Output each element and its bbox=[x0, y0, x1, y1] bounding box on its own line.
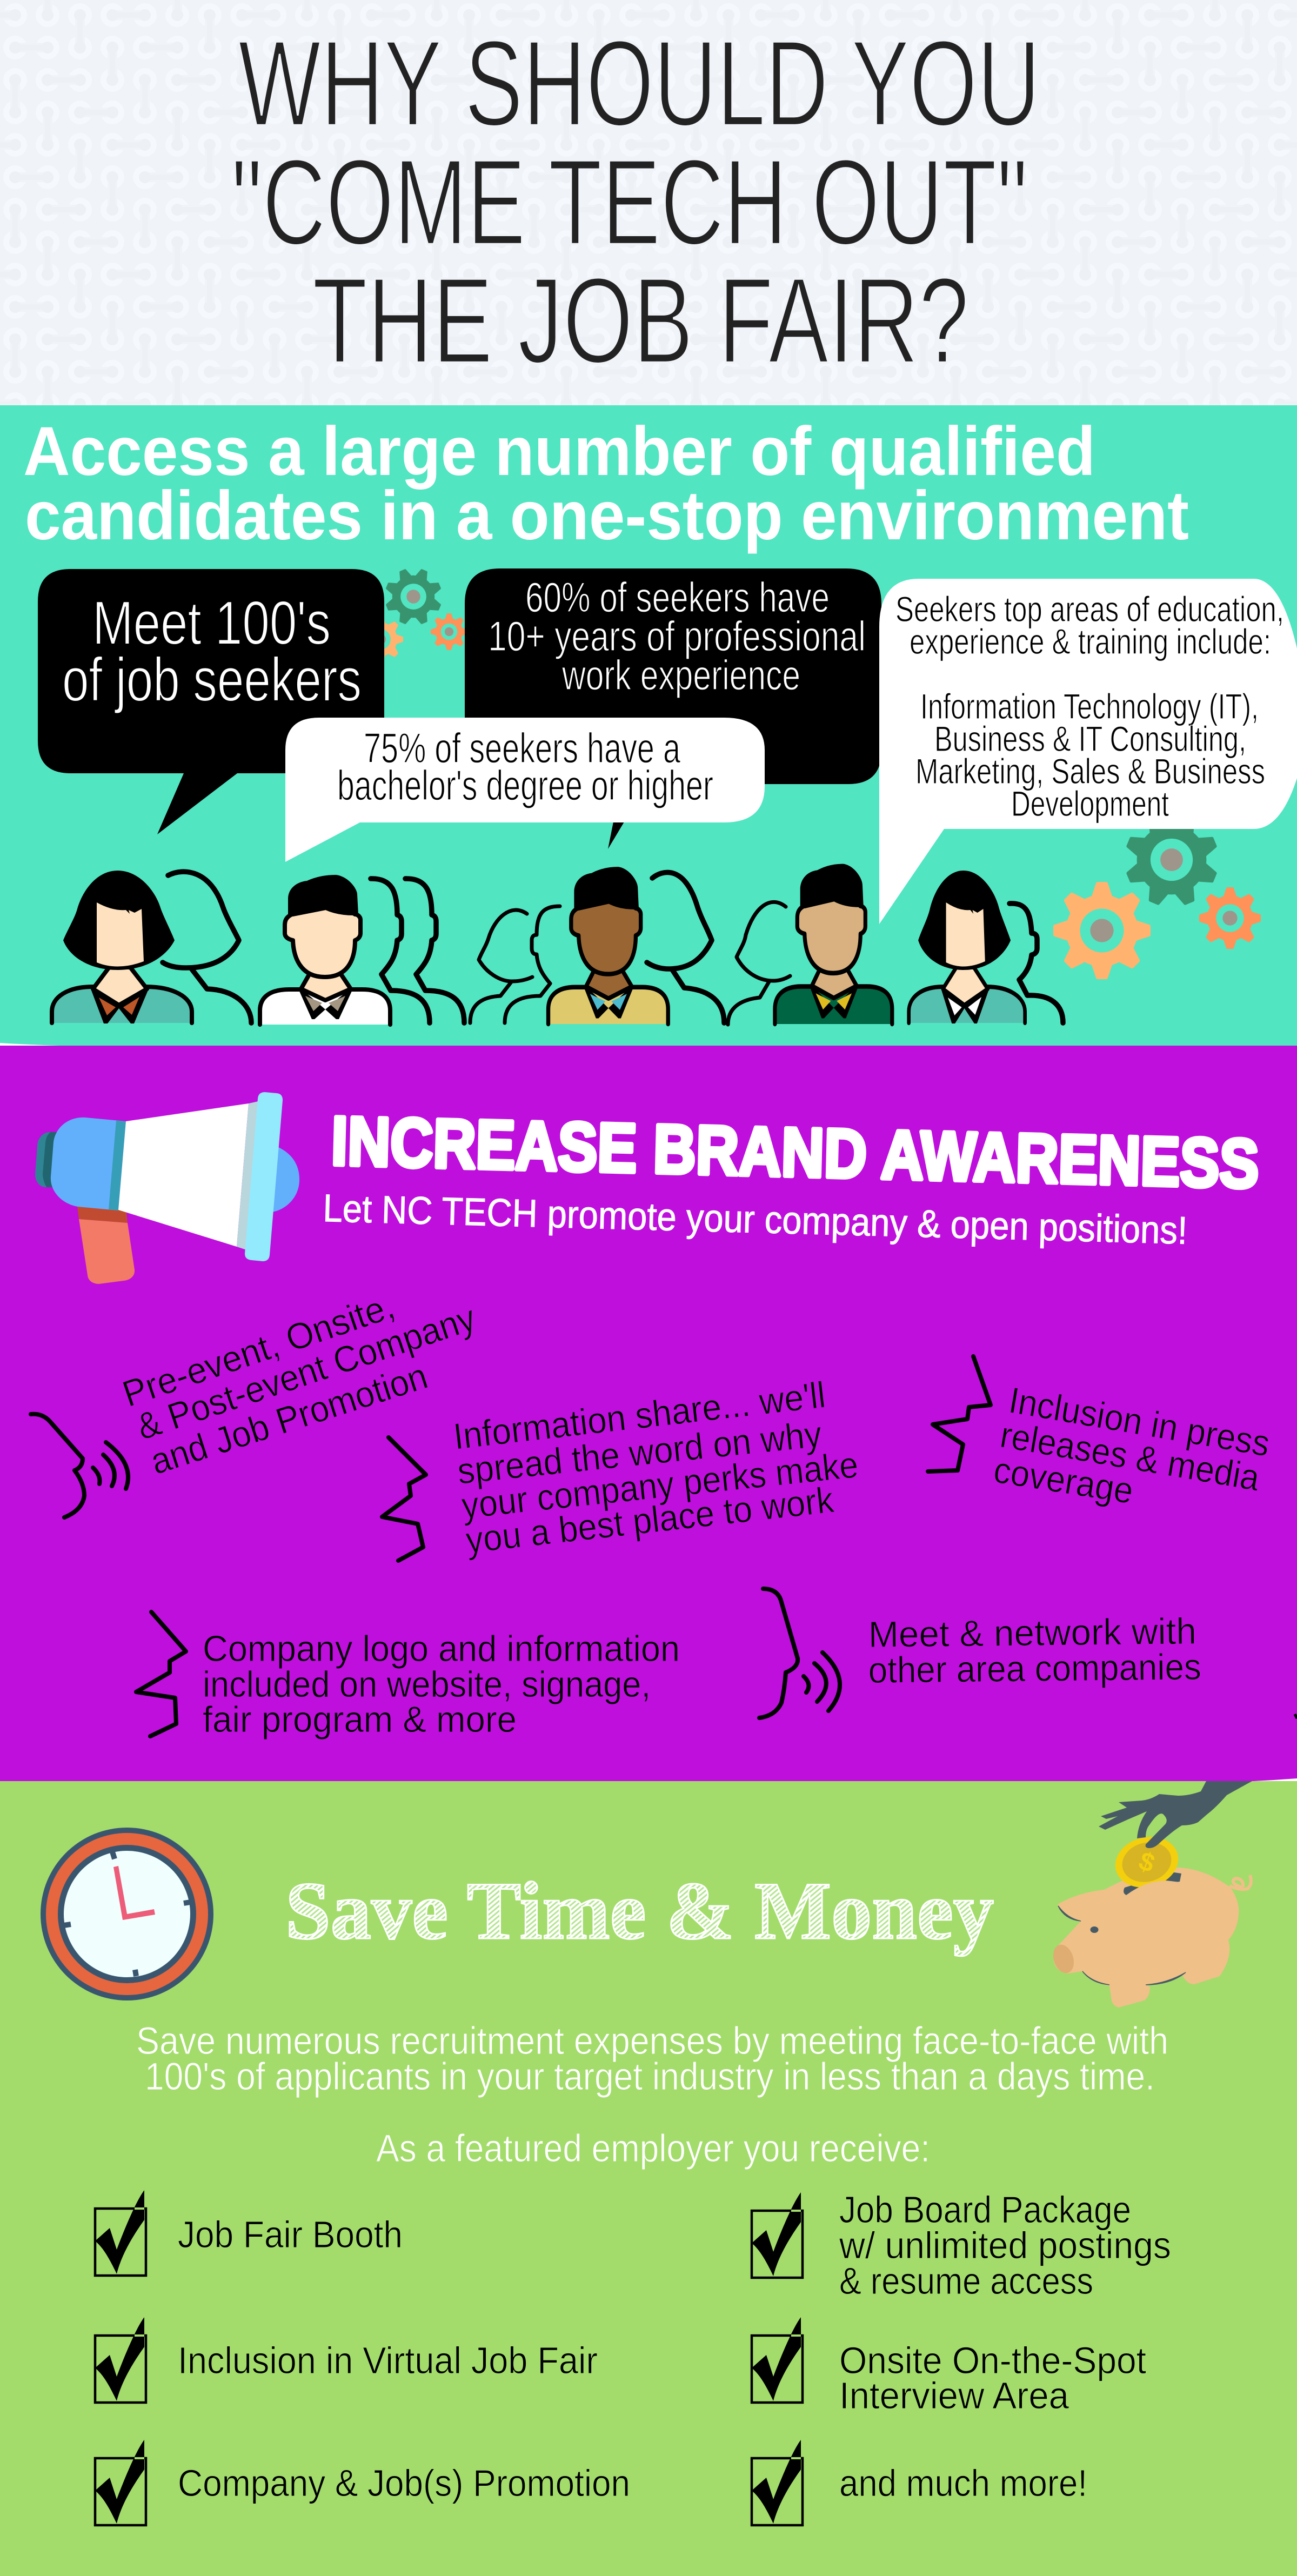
callout: company logo: included on website, signage, bbox=[203, 1664, 651, 1705]
section heading: Access a large number of qualified bbox=[23, 413, 1095, 490]
person: woman with teal blouse bbox=[52, 871, 192, 1023]
callout: press releases: releases & media bbox=[997, 1414, 1263, 1499]
speech bubble: top areas of education bbox=[879, 579, 1297, 924]
speech bubble: 75% of seekers bbox=[285, 718, 765, 862]
callout: information share: Information share... we'll bbox=[451, 1374, 827, 1457]
callout: pre-event promotion: and Job Promotion bbox=[145, 1355, 432, 1482]
panel: access qualified candidates bbox=[0, 405, 1297, 1046]
section heading bbox=[23, 413, 1189, 554]
callout: company logo bbox=[136, 1612, 680, 1740]
item: Job Board Package bbox=[839, 2189, 1131, 2231]
callout: information share bbox=[382, 1374, 860, 1561]
icon: gears bottom right bbox=[1053, 798, 1261, 979]
person: man with green shirt bbox=[775, 864, 892, 1024]
icon: checkbox bbox=[752, 2440, 803, 2525]
callout: company logo: Company logo and information bbox=[203, 1628, 680, 1669]
callout: information share: you a best place to work bbox=[464, 1479, 836, 1561]
speech bubble: 60% of seekers: 60% of seekers have bbox=[525, 573, 830, 621]
icon: checkbox bbox=[95, 2317, 146, 2403]
callout: information share: your company perks make bbox=[460, 1444, 860, 1527]
icon: clock bbox=[41, 1828, 213, 2000]
item: w/ unlimited postings bbox=[839, 2224, 1171, 2266]
panel: save time and money bbox=[0, 1781, 1297, 2576]
item: Onsite On-the-Spot bbox=[839, 2339, 1146, 2381]
icon: checkbox bbox=[752, 2192, 803, 2278]
section heading: Save Time & Money bbox=[285, 1865, 994, 1956]
outlines: background crowd bbox=[163, 872, 1063, 1025]
body text: As a featured employer you receive: bbox=[376, 2127, 930, 2170]
body text: Save numerous recruitment expenses by meeting face-to-face with bbox=[136, 2020, 1168, 2063]
speech bubble: 75% of seekers: bachelor's degree or higher bbox=[337, 761, 713, 809]
title: THE JOB FAIR? bbox=[312, 252, 969, 389]
item: & resume access bbox=[839, 2260, 1093, 2302]
speech bubble: 60% of seekers: work experience bbox=[561, 651, 800, 699]
callout: meet and network: other area companies bbox=[868, 1647, 1201, 1691]
item bbox=[839, 2339, 1146, 2417]
person: man with yellow shirt bbox=[549, 867, 668, 1024]
speech bubble: 75% of seekers: 75% of seekers have a bbox=[364, 724, 680, 772]
speech bubble: top areas of education: Development bbox=[1011, 784, 1169, 824]
icon: checkbox bbox=[95, 2190, 146, 2276]
item: Inclusion in Virtual Job Fair bbox=[178, 2339, 598, 2381]
panel: title header bbox=[0, 0, 1297, 405]
section heading: candidates in a one-stop environment bbox=[25, 477, 1189, 554]
callout: press releases: coverage bbox=[991, 1449, 1136, 1511]
icon: checkbox bbox=[752, 2317, 803, 2403]
title bbox=[231, 15, 1040, 389]
icon: piggy bank with hand and coin bbox=[1050, 1781, 1252, 2008]
body text bbox=[136, 2020, 1168, 2170]
item: Company & Job(s) Promotion bbox=[178, 2462, 630, 2504]
speech bubble: meet 100's: Meet 100's bbox=[92, 589, 331, 658]
callout: pre-event promotion bbox=[31, 1285, 480, 1517]
speech bubble: meet 100's: of job seekers bbox=[62, 646, 362, 714]
checklist: right column bbox=[752, 2189, 1171, 2525]
callout: meet and network: Meet & network with bbox=[868, 1611, 1196, 1655]
speech bubble: 60% of seekers: 10+ years of professional bbox=[488, 612, 866, 660]
callout: pre-event promotion: & Post-event Company bbox=[132, 1297, 480, 1448]
icon: piggy bank with hand and coin: $ bbox=[1135, 1846, 1159, 1878]
callout: press releases: Inclusion in press bbox=[1006, 1380, 1273, 1464]
callout: press releases bbox=[928, 1356, 1273, 1511]
item: and much more! bbox=[839, 2462, 1087, 2504]
speech bubble: 60% of seekers bbox=[465, 568, 881, 849]
callout: pre-event promotion: Pre-event, Onsite, bbox=[117, 1285, 399, 1415]
callout: company logo: fair program & more bbox=[203, 1699, 517, 1740]
callout: information share: spread the word on why bbox=[456, 1414, 824, 1492]
person: woman with white collar bbox=[909, 871, 1025, 1023]
icon: megaphone bbox=[35, 1092, 299, 1284]
person: man with white shirt bbox=[260, 875, 390, 1025]
speech bubble: meet 100's bbox=[38, 569, 384, 834]
callout: meet and network bbox=[759, 1589, 1201, 1718]
item bbox=[839, 2189, 1171, 2302]
body text: 100's of applicants in your target industry in less than a days time. bbox=[145, 2056, 1155, 2098]
panel: increase brand awareness bbox=[0, 1046, 1297, 1781]
item: Interview Area bbox=[839, 2374, 1069, 2417]
subheading: Let NC TECH promote your company & open positions! bbox=[323, 1187, 1188, 1253]
icon: checkbox bbox=[95, 2440, 146, 2525]
icon: gears top bbox=[358, 559, 467, 662]
item: Job Fair Booth bbox=[178, 2213, 403, 2256]
checklist: left column bbox=[95, 2190, 630, 2525]
